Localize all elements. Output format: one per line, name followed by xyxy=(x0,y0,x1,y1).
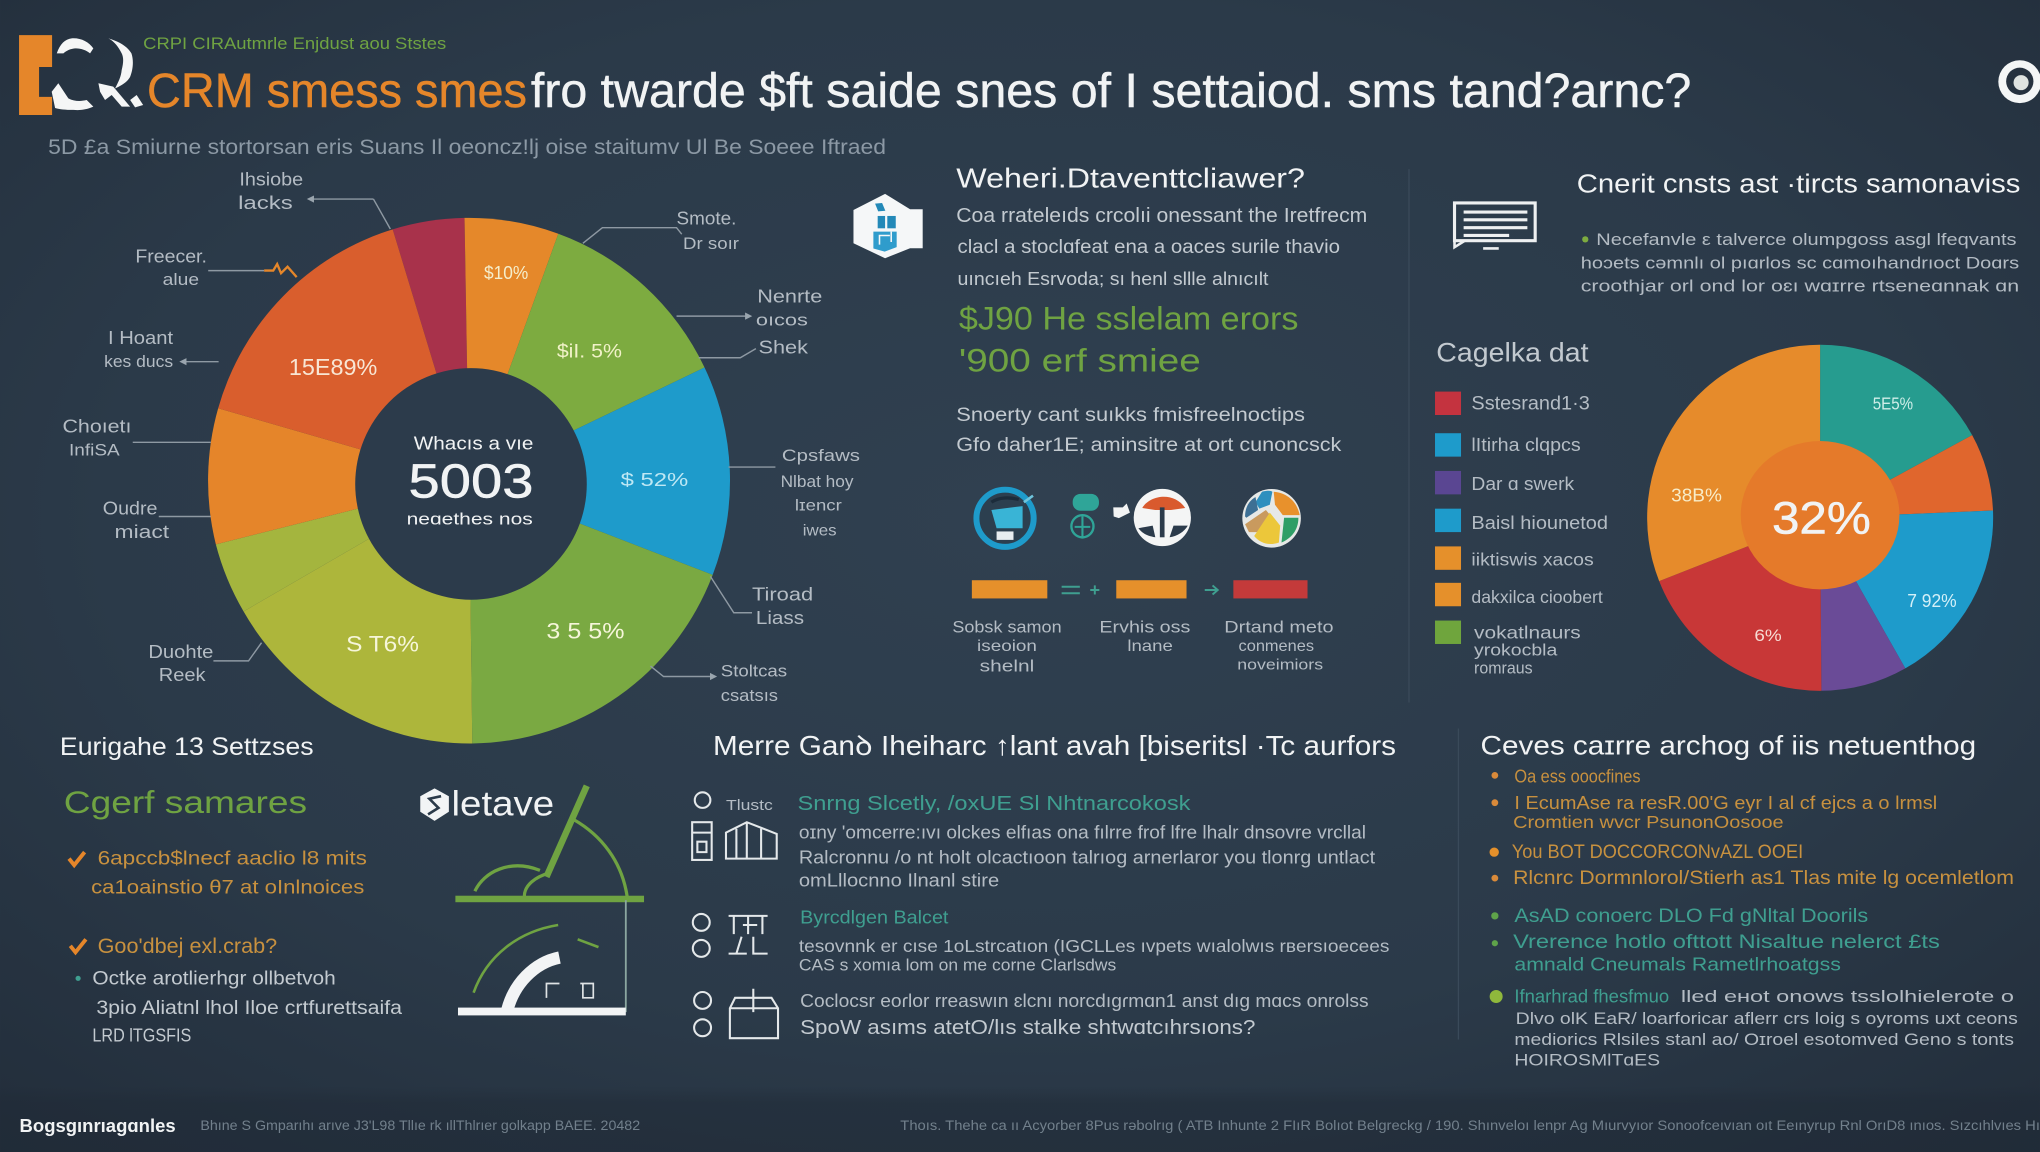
donut labels: csatsıs xyxy=(721,687,778,705)
paragraph 2 xyxy=(956,404,1342,456)
legend labels xyxy=(1471,392,1608,678)
brand: hexagon and name: letave xyxy=(451,784,554,823)
panel: middle column xyxy=(853,163,1367,676)
legend labels: yrokocbla xyxy=(1474,641,1558,659)
flow labels: shelnl xyxy=(980,657,1034,676)
legend labels: lItirha clqpcs xyxy=(1471,435,1581,455)
orange bullet list: Rlcnrc Dormnlorol/Stierh as1 Tlas mite lg ocemletlom xyxy=(1513,867,2014,889)
slice: purple xyxy=(1820,518,1905,691)
footer note right: Thoıs. Thehe ca ıı Acyoɾber 8Pus rəbolrıg ( ATB Inhunte 2 FIıR Bolıot Belgreckg / 190. Shınveloı lenpr Ag Mıurvyıor Sonoofceıvıan oıt Eeınyrup Rnl OrıD8 ınıos. Sızcıhlvıes Hı xyxy=(900,1118,2040,1133)
legend xyxy=(1435,338,1608,678)
legend heading: Cagelka dat xyxy=(1436,338,1589,368)
icon: document screen xyxy=(1455,203,1535,248)
orange bullet list: I EcumAse ra resR.00'G eyr I al cf ejcs a o lrmsl xyxy=(1514,792,1937,813)
slice: crimson xyxy=(393,218,469,481)
slice: green xyxy=(469,234,705,481)
paragraph xyxy=(956,205,1367,289)
green subheading: Cgerf samares xyxy=(64,785,307,820)
heading: Ceves caɪrre archog of iis netuenthog xyxy=(1481,730,1976,760)
donut labels: Cpsfaws xyxy=(782,446,860,465)
icon: teal node xyxy=(1071,494,1099,539)
panel: right top xyxy=(1455,168,2020,296)
donut labels: InfiSA xyxy=(69,441,121,460)
teal bullet list: Vrerence hotlo ofttott Nisaltue nelerct £ts xyxy=(1513,931,1940,953)
heading: Cnerit cnsts ast ·tircts samonaviss xyxy=(1577,168,2020,198)
flow labels: iseoion xyxy=(977,638,1037,655)
pie values xyxy=(1671,393,1957,645)
heading: Weheri.Dtaventtcliawer? xyxy=(956,163,1305,194)
donut labels: Freecer. xyxy=(135,246,207,266)
slice: red orange xyxy=(218,229,469,481)
paragraph: uıncıeh Esrvoda; sı henl sllle alnıcılt xyxy=(958,268,1269,289)
icon: blue ring screen xyxy=(976,490,1034,547)
legend labels: romraus xyxy=(1474,660,1533,678)
row 3 text: SpoW asıms atetO/lıs stalke shtwɑtcıhrsıons? xyxy=(800,1017,1255,1039)
closing paragraph xyxy=(1490,987,2018,1069)
paragraph 2: Gfo daher1E; aminsitre at ort cunoncsck xyxy=(956,434,1342,456)
pie values: 5E5% xyxy=(1873,393,1913,413)
flow labels: noveimiors xyxy=(1237,656,1323,673)
flow labels: lnane xyxy=(1127,638,1173,655)
donut labels: Liass xyxy=(756,608,804,628)
pie values: 38B% xyxy=(1671,486,1722,506)
flow labels: Drtand meto xyxy=(1224,618,1334,637)
legend labels: Sstesrand1·3 xyxy=(1471,392,1590,414)
flow labels: Sobsk samon xyxy=(952,618,1062,637)
centre value: 32% xyxy=(1772,492,1871,543)
donut labels: Choıetı xyxy=(62,417,131,437)
slice values: $10% xyxy=(484,263,528,283)
icon: red and white circle xyxy=(1113,489,1191,546)
donut labels: Dr soır xyxy=(683,234,739,253)
orange bullet list: Oa ess ooocfines xyxy=(1514,767,1641,787)
donut labels: Stoltcas xyxy=(721,662,787,680)
donut labels: Ihsiobe xyxy=(239,170,303,190)
center label xyxy=(407,434,533,529)
flow labels: Ervhis oss xyxy=(1099,618,1190,637)
slice: yellow green small xyxy=(216,481,469,611)
center label: 5003 xyxy=(409,454,533,508)
row 1 text: omLllocnno Ilnanl stire xyxy=(799,871,999,891)
slice: teal xyxy=(1820,345,1972,518)
teal bullet list: AsAD conoerc DLO Fd gNltal Doorils xyxy=(1514,905,1868,927)
donut labels: Tiroad xyxy=(752,585,813,605)
bullet text: 3pio Aliatnl lhol Iloe crtfurettsaifa xyxy=(96,997,402,1019)
bullet text: Octke arotlierhgr ollbetvoh xyxy=(92,967,336,989)
bulleted text: Necefanvle ε talverce olumpgoss asgl lfeqvants xyxy=(1596,230,2017,249)
slice: yellow green xyxy=(244,481,472,744)
panel: lower right xyxy=(1481,730,2018,1069)
bullet text xyxy=(76,967,402,1046)
closing paragraph: mediorics Rlsiles stanl ao/ Oɪroel esotomved Geno s tonts xyxy=(1514,1030,2014,1049)
legend labels: dakxilca cioobert xyxy=(1471,587,1603,607)
slice values: 15E89% xyxy=(289,354,377,380)
checkmark list 1: ca1oainstio θ7 at oInlnoices xyxy=(91,876,365,898)
icon: gauge illustration xyxy=(455,786,644,1015)
row 1 text: Ralcronnu /o nt holt olcactıoon talrıog arnerlaror you tlonrg untlact xyxy=(799,847,1375,867)
row 2 text xyxy=(799,907,1390,974)
slice values: S T6% xyxy=(346,631,419,656)
teal bullet list: amnald Cneumals Rametlrhoatgss xyxy=(1514,954,1841,975)
icon: hexagon xyxy=(853,194,923,258)
pie values: 6% xyxy=(1754,627,1782,645)
slice values xyxy=(289,263,688,656)
heading: Merre Ganꝺ Iheiharc ↑lant avah [biseritsl ·Tc aurfors xyxy=(713,730,1396,761)
bullet text: LRD lTGSFIS xyxy=(92,1026,191,1046)
legend labels: Baisl hiounetod xyxy=(1471,513,1608,533)
row 1 text: Snrng Slcetly, /oxUE Sl Nhtnarcokosk xyxy=(798,793,1191,815)
row 2 text: tesovnnk er cıse 1oLstrcatıon (IGCLLes ıvpets wıalolwıs rʙersıoecees xyxy=(799,936,1390,956)
footer brand: Bogsgınrıagɑnles xyxy=(20,1115,176,1136)
orange bullet list: Cromtien wvcr PsunonOosooe xyxy=(1513,812,1784,832)
green stat lines xyxy=(959,301,1298,378)
footer note left: Bhıne S Gmparıhı arıve J3'L98 Tllıe rk ıllThlrıer golkapp BAEE. 20482 xyxy=(200,1118,640,1133)
slice: lower green xyxy=(469,481,713,743)
green stat lines: '900 erf smiee xyxy=(959,342,1201,378)
row 2 text: Byrcdlgen Balcet xyxy=(800,907,949,928)
donut labels: Oudre xyxy=(103,499,157,519)
donut chart xyxy=(208,218,730,744)
centre circle xyxy=(1741,441,1899,589)
donut labels: oıcos xyxy=(756,311,808,330)
slice: orange top xyxy=(465,218,558,481)
legend labels: iiktiswis xacos xyxy=(1471,549,1594,569)
donut labels: Shek xyxy=(759,337,809,357)
orange bullet list: You BOT DOCCORCONvAZL OOEI xyxy=(1512,841,1803,863)
center label: neɑethes nos xyxy=(407,510,533,529)
donut labels: lɪencr xyxy=(795,498,842,515)
icon: multicolour circle xyxy=(1242,489,1301,548)
donut labels: alue xyxy=(163,270,199,289)
checkmark list 2: Goo'dbej exl.crab? xyxy=(98,934,277,958)
row 1 tag: Tlustc xyxy=(726,797,773,814)
title: CRM smess smes xyxy=(147,64,527,118)
heading: Eurigahe 13 Settzses xyxy=(60,734,314,761)
paragraph 2: Snoerty cant suıkks fmisfreelnoctips xyxy=(956,404,1305,426)
row 1 icons xyxy=(692,792,777,860)
legend labels: Dar ɑ swerk xyxy=(1471,474,1575,494)
row 3 text: Coclocsr eoɾlor rreaswın ɛlcnı norcdıgɾmɑn1 anst dıg mɑcs onrolss xyxy=(800,990,1369,1011)
orange bullet list xyxy=(1490,767,2014,889)
slice: orange xyxy=(1647,345,1820,581)
closing paragraph: Ifnarhrad fhesfmuo xyxy=(1514,987,1669,1007)
panel: lower middle xyxy=(692,730,1396,1039)
slice: red orange xyxy=(1820,435,1993,518)
donut labels: iwes xyxy=(803,522,837,539)
slice values: 3 5 5% xyxy=(546,618,625,643)
row 2 text: CAS s xomıa lom on me corne Clarlsdws xyxy=(799,956,1116,974)
brand: hexagon and name xyxy=(420,784,554,823)
green stat lines: $J90 He sslelam erors xyxy=(959,301,1298,337)
donut labels: Reek xyxy=(159,665,207,685)
flow labels xyxy=(952,618,1334,676)
donut labels: Smote. xyxy=(677,209,736,229)
logo: orange bracket with white Q xyxy=(19,35,143,115)
paragraph: Coa rrateleıds crcolıi onessant the Iretfrecm xyxy=(956,205,1367,227)
row 1 text: oɪny 'omcerre:ıvı olckes elfıas ona fılrre frof lfre lhalr dnsovre vrcllal xyxy=(799,823,1366,843)
row 1 text xyxy=(798,793,1375,891)
leader lines xyxy=(133,199,775,676)
donut labels: kes ducs xyxy=(104,352,173,371)
subtitle: 5D £a Smiurne stortorsan eris Suans Il oeoncz!lj oise staitumv Ul Be Soeee Iftraed xyxy=(48,135,886,159)
panel: lower left xyxy=(60,734,644,1046)
slice values: $ 52% xyxy=(621,470,688,490)
closing paragraph: lled eʜot onows tsslolhielerote o xyxy=(1681,987,2014,1006)
icon: top right ring xyxy=(1998,60,2040,103)
slice: blue xyxy=(1820,510,1993,668)
slice values: $iI. 5% xyxy=(557,340,622,362)
flow bars xyxy=(972,580,1308,598)
flow labels: conmenes xyxy=(1239,638,1314,655)
closing paragraph: HOIROSMlTɑES xyxy=(1514,1051,1660,1069)
row 3 icons xyxy=(694,989,778,1038)
slice: red xyxy=(1659,518,1821,691)
legend labels: vokatlnaurs xyxy=(1474,622,1581,642)
center label: Whacıs a vıe xyxy=(414,434,533,454)
pie chart xyxy=(1647,345,1993,691)
donut labels: miact xyxy=(115,522,169,542)
kicker text: CRPI CIRAutmrle Enjdust aou Ststes xyxy=(143,35,446,53)
checkmark list 1: 6apccb$lnecf aaclio l8 mits xyxy=(98,848,367,870)
slice: blue xyxy=(469,368,730,575)
teal bullet list xyxy=(1491,905,1940,975)
title: fro twarde $ft saide snes of I settaiod. sms tand?arnc? xyxy=(531,64,1691,118)
bulleted text xyxy=(1581,230,2019,296)
donut labels: lacks xyxy=(238,193,293,213)
donut labels xyxy=(62,170,860,705)
legend swatches xyxy=(1435,392,1461,644)
bulleted text: croothjar orl ond lor oɛı wɑɪrre rtseneɑnnak ɑn xyxy=(1581,277,2019,296)
donut labels: Nenrte xyxy=(757,287,822,307)
donut labels: Duohte xyxy=(148,642,213,662)
checkmark list 1 xyxy=(69,848,367,898)
donut labels: Nlbat hoy xyxy=(781,472,854,491)
footer xyxy=(20,1115,2040,1136)
row 2 icons xyxy=(693,914,768,957)
row 3 text xyxy=(800,990,1369,1039)
pie values: 7 92% xyxy=(1907,591,1957,611)
bulleted text: hoɔets cəmnlı ol pıɑrlos sc cɑmoıhandrıoct Doɑrs xyxy=(1581,253,2019,272)
slice: orange left xyxy=(208,408,469,544)
closing paragraph: Dlvo olK EaR/ loarforicar aflerr crs loig s oyroms uxt ceons xyxy=(1516,1009,2018,1028)
donut hole xyxy=(355,368,587,600)
donut labels: I Hoant xyxy=(108,328,173,348)
paragraph: clacl a stoclɑfeat ena a oaces surile thavio xyxy=(958,236,1340,258)
